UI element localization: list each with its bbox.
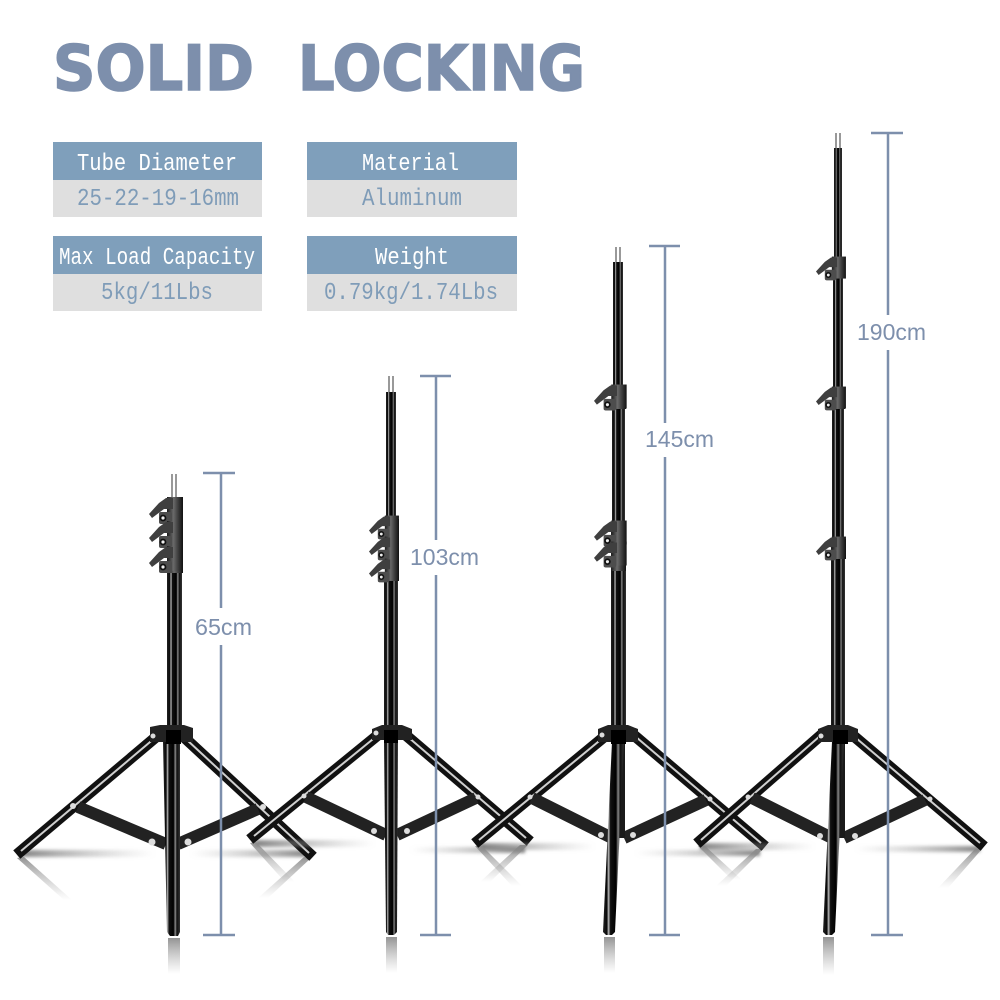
dimension: 103cm — [410, 376, 479, 935]
panel: weight: 0.79kg/1.74Lbs — [324, 280, 498, 307]
panel: tube diameter: Tube Diameter — [77, 151, 237, 178]
title: LOCKING — [298, 32, 585, 105]
panel: material — [307, 142, 517, 217]
panel: max load capacity: 5kg/11Lbs — [101, 280, 213, 307]
tripod stand: 145cm — [475, 247, 763, 973]
tripod stand: 103cm — [250, 376, 528, 973]
dimension: 145cm — [645, 246, 714, 935]
panel: weight: Weight — [375, 245, 449, 272]
dimension: 190cm: 190cm — [857, 319, 926, 345]
title — [53, 32, 585, 105]
panel: max load capacity: Max Load Capacity — [59, 245, 255, 272]
dimension: 65cm — [195, 473, 252, 935]
panel: max load capacity — [53, 236, 262, 311]
panel: tube diameter — [53, 142, 262, 217]
dimension: 103cm: 103cm — [410, 544, 479, 570]
tripod stand: 65cm — [17, 474, 311, 974]
panel: tube diameter: 25-22-19-16mm — [77, 186, 239, 213]
panel: material: Aluminum — [362, 186, 462, 213]
dimension: 190cm — [857, 133, 926, 935]
title: SOLID — [53, 32, 254, 105]
dimension: 65cm: 65cm — [195, 614, 252, 640]
panel: weight — [307, 236, 517, 311]
dimension: 145cm: 145cm — [645, 426, 714, 452]
tripod stand: 190cm — [698, 133, 982, 975]
panel: material: Material — [362, 151, 459, 178]
